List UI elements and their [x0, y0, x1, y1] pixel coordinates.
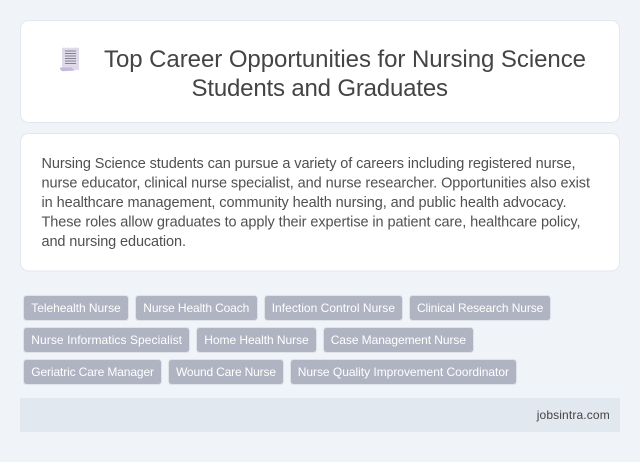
heading — [104, 46, 586, 102]
text block: description: nurse educator, clinical nurse specialist, and nurse researcher. Opportunities also exist — [42, 176, 590, 192]
tag: Nurse Quality Improvement Coordinator: Nurse Quality Improvement Coordinator — [298, 365, 509, 379]
tag: Geriatric Care Manager: Geriatric Care Manager — [31, 365, 154, 379]
footer source text: jobsintra.com — [536, 408, 610, 422]
tag: Infection Control Nurse — [264, 296, 402, 320]
tag: Wound Care Nurse: Wound Care Nurse — [176, 365, 276, 379]
tag: Case Management Nurse: Case Management Nurse — [331, 333, 466, 347]
tag: Nurse Health Coach — [136, 296, 258, 320]
tag: Nurse Informatics Specialist — [24, 328, 190, 352]
text block: description — [42, 156, 590, 250]
footer bar — [20, 398, 620, 432]
tag: Clinical Research Nurse — [410, 296, 550, 320]
tag: Clinical Research Nurse: Clinical Research Nurse — [417, 301, 544, 315]
tag: Case Management Nurse — [324, 328, 474, 352]
text block: description: in healthcare management, community health nursing, and public health advocacy. — [42, 195, 566, 211]
tag: Nurse Informatics Specialist: Nurse Informatics Specialist — [31, 333, 183, 347]
tag: Home Health Nurse: Home Health Nurse — [204, 333, 309, 347]
tag list — [24, 296, 550, 384]
heading: Students and Graduates — [192, 75, 448, 102]
heading: Top Career Opportunities for Nursing Science — [104, 46, 586, 73]
icon: document scroll — [60, 48, 79, 71]
text block: description: These roles allow graduates to apply their expertise in patient care, healthcare policy, — [42, 214, 580, 230]
tag: Infection Control Nurse: Infection Control Nurse — [272, 301, 395, 315]
panel: description card — [20, 134, 620, 271]
tag: Home Health Nurse — [196, 328, 316, 352]
tag: Geriatric Care Manager — [24, 360, 162, 384]
text block: description: Nursing Science students can pursue a variety of careers including registered nurse, — [42, 156, 576, 172]
text block: description: and nursing education. — [42, 234, 186, 250]
panel: title card — [20, 20, 620, 122]
tag: Telehealth Nurse — [24, 296, 128, 320]
tag: Nurse Quality Improvement Coordinator — [290, 360, 516, 384]
tag: Wound Care Nurse — [168, 360, 284, 384]
tag: Telehealth Nurse: Telehealth Nurse — [31, 301, 121, 315]
tag: Nurse Health Coach: Nurse Health Coach — [143, 301, 249, 315]
